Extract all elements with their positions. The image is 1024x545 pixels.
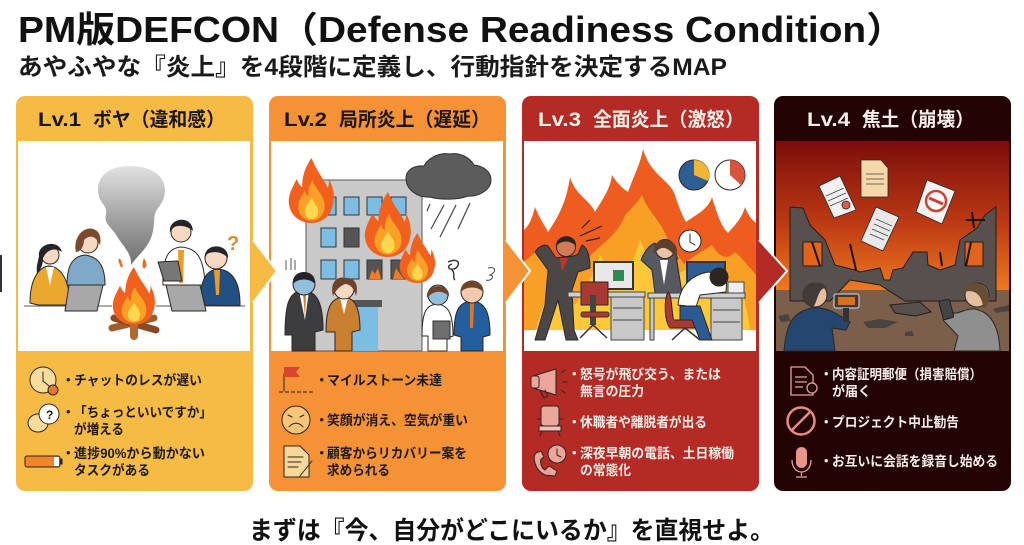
illustration: burning building <box>271 141 503 351</box>
heading: Lv.1: Lv.1 <box>38 109 81 131</box>
text: night and weekend work: の常態化 <box>580 462 631 478</box>
icon: megaphone <box>531 369 567 398</box>
left edge mark <box>0 255 2 292</box>
icon: certified document <box>791 367 817 395</box>
illustration: campfire meeting <box>18 141 250 351</box>
panel: Lv.1 <box>16 96 253 491</box>
illustration: scorched ruins <box>776 141 1009 351</box>
icon: phone and clock <box>534 445 566 476</box>
text: milestone: ・ <box>315 373 328 388</box>
text: recovery plan: 顧客からリカバリー案を <box>327 445 467 461</box>
text: shouting <box>568 366 721 399</box>
text: stuck tasks: ・ <box>62 446 75 461</box>
text: quick question: 「ちょっといいですか」 <box>74 405 212 420</box>
icon: battery 90% <box>25 456 62 467</box>
text: quick question: ・ <box>62 405 75 420</box>
heading: Lv.4: 焦土（崩壊） <box>862 109 974 131</box>
heading: Lv.4: Lv.4 <box>807 109 850 131</box>
panel: Lv.2 <box>269 96 506 491</box>
arrow: Lv.2 to Lv.3 <box>505 240 530 303</box>
heading: Lv.3: Lv.3 <box>538 109 581 131</box>
text: quick question <box>62 405 212 437</box>
closing message: まずは『今、自分がどこにいるか』を直視せよ。 <box>249 516 774 545</box>
panel: Lv.3 <box>522 96 759 491</box>
icon: question bubbles: ? <box>46 408 53 422</box>
text: legal letter <box>820 366 982 399</box>
illustration: office on fire <box>524 141 756 351</box>
text: night and weekend work <box>568 445 734 478</box>
list: Lv.3 signs <box>531 366 734 478</box>
text: project stop: ・ <box>820 415 833 430</box>
text: legal letter: が届く <box>832 383 871 399</box>
arrow: Lv.3 to Lv.4 <box>758 240 787 303</box>
illustration: campfire meeting: ? <box>227 233 239 255</box>
icon: empty chair <box>537 406 563 436</box>
text: legal letter: ・ <box>820 367 833 382</box>
text: recovery plan: 求められる <box>327 462 390 478</box>
icon: document and pen <box>284 446 312 477</box>
text: stuck tasks: タスクがある <box>74 462 150 478</box>
text: night and weekend work: 深夜早朝の電話、土日稼働 <box>580 445 734 461</box>
heading: Lv.4 <box>807 109 974 131</box>
list: Lv.4 signs <box>788 366 998 477</box>
text: recovery plan <box>315 445 467 478</box>
icon: late clock <box>30 367 58 395</box>
text: chat reply: ・ <box>62 373 75 388</box>
text: recovery plan: ・ <box>315 446 328 461</box>
text: recording: ・ <box>820 454 833 469</box>
text: milestone: マイルストーン未達 <box>327 372 442 388</box>
text: chat reply: チャットのレスが遅い <box>74 372 202 388</box>
text: night and weekend work: ・ <box>568 446 581 461</box>
panel: Lv.4 <box>774 96 1011 491</box>
subtitle: あやふやな『炎上』を4段階に定義し、行動指針を決定するMAP <box>18 54 727 81</box>
text: project stop: プロジェクト中止勧告 <box>832 414 959 430</box>
text: leavers: 休職者や離脱者が出る <box>580 414 707 430</box>
heading: Lv.1 <box>38 108 225 131</box>
arrow: Lv.1 to Lv.2 <box>252 240 277 303</box>
icon: milestone flag <box>279 367 314 392</box>
icon: sad face <box>282 406 310 434</box>
list: Lv.1 signs <box>25 367 212 478</box>
icon: prohibited sign <box>788 408 814 434</box>
text: recording: お互いに会話を録音し始める <box>832 453 998 469</box>
icon: microphone <box>792 447 811 477</box>
text: mood: ・ <box>315 413 328 428</box>
text: quick question: が増える <box>74 421 124 437</box>
heading: Lv.1: ボヤ（違和感） <box>93 108 225 131</box>
text: leavers: ・ <box>568 415 581 430</box>
heading: Lv.2: Lv.2 <box>284 109 327 131</box>
text: stuck tasks: 進捗90%から動かない <box>74 445 205 461</box>
icon: question bubbles <box>28 404 59 432</box>
title: PM版DEFCON（Defense Readiness Condition） <box>18 9 905 50</box>
heading: Lv.2: 局所炎上（遅延） <box>339 109 490 131</box>
text: mood: 笑顔が消え、空気が重い <box>327 412 468 428</box>
list: Lv.2 signs <box>279 367 468 478</box>
text: stuck tasks <box>62 445 205 478</box>
text: shouting: ・ <box>568 367 581 382</box>
text: shouting: 怒号が飛び交う、または <box>580 366 721 382</box>
text: shouting: 無言の圧力 <box>580 383 644 399</box>
text: legal letter: 内容証明郵便（損害賠償） <box>832 366 982 382</box>
heading: Lv.3: 全面炎上（激怒） <box>593 109 744 131</box>
